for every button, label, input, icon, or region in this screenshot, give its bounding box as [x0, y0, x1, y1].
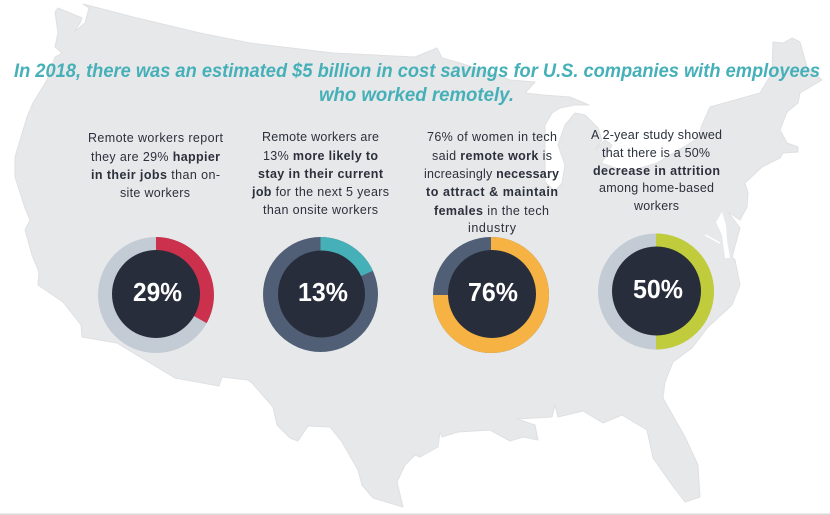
text block: decrease in attrition: workers [633, 199, 679, 213]
text block: women in tech: industry [468, 221, 517, 235]
donut chart: 76% [433, 237, 549, 353]
title: who worked remotely. [319, 85, 514, 106]
text block: happier in their jobs: they are 29% happier [91, 150, 220, 164]
text block: happier in their jobs: Remote workers report [88, 131, 224, 145]
text block: women in tech: females in the tech [434, 204, 549, 218]
text block: decrease in attrition: A 2-year study showed [591, 128, 722, 142]
title: In 2018, there was an estimated $5 billion in cost savings for U.S. companies with employees [14, 61, 820, 82]
donut chart: 29%: 29% [133, 277, 182, 307]
text block: more likely to stay: 13% more likely to [263, 149, 378, 163]
text block: decrease in attrition: among home-based [599, 181, 714, 195]
text block: more likely to stay: Remote workers are [262, 130, 379, 144]
text block: women in tech: to attract & maintain [426, 185, 558, 199]
bottom rule [0, 514, 830, 515]
text block: women in tech: increasingly necessary [424, 167, 559, 181]
text block: more likely to stay [251, 130, 389, 217]
text block: more likely to stay: than onsite workers [263, 203, 378, 217]
donut chart: 76%: 76% [468, 277, 518, 307]
text block: decrease in attrition: that there is a 50% [602, 146, 710, 160]
text block: decrease in attrition: decrease in attrition [593, 164, 720, 178]
donut chart: 50% [598, 234, 714, 350]
text block: decrease in attrition [591, 128, 722, 213]
donut chart: 29% [98, 237, 214, 353]
text block: more likely to stay: stay in their current [258, 167, 384, 181]
text block: women in tech: 76% of women in tech [427, 130, 557, 144]
donut chart: 13% [263, 237, 378, 352]
text block: women in tech: said remote work is [432, 149, 552, 163]
donut chart: 50%: 50% [633, 274, 683, 304]
donut chart: 13%: 13% [298, 277, 348, 307]
text block: happier in their jobs: in their jobs than on- [91, 168, 220, 182]
text block: women in tech [424, 130, 559, 235]
title [14, 61, 820, 106]
text block: more likely to stay: job for the next 5 years [251, 185, 389, 199]
text block: happier in their jobs [88, 131, 224, 200]
text block: happier in their jobs: site workers [120, 186, 190, 200]
